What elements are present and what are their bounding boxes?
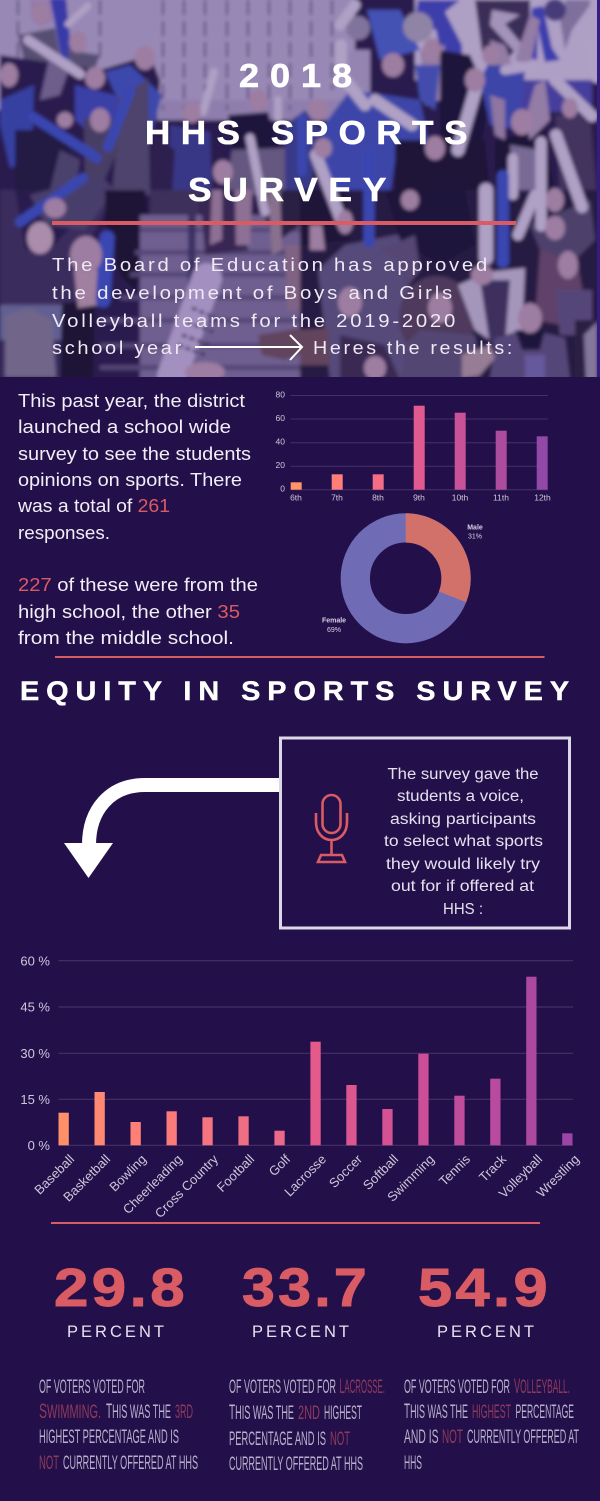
callout box	[280, 738, 570, 928]
bar chart: responses by grade: 11th	[493, 493, 509, 503]
icon: microphone	[316, 795, 347, 862]
infographic page: CURRENTLY OFFERED AT HHS	[63, 1453, 198, 1474]
stat: volleyball: NOT	[442, 1427, 463, 1448]
bar chart: responses by grade: 6th	[290, 493, 302, 503]
bar chart: sports interest: Track	[476, 1151, 509, 1185]
stat: lacrosse: 2ND	[298, 1403, 320, 1424]
top middle crowd	[168, 125, 212, 195]
heading: equity in sports survey: EQUITY IN SPORTS SURVEY	[20, 676, 576, 706]
bar chart: responses by grade	[276, 390, 551, 503]
blue tubes	[20, 92, 503, 300]
survey summary text: high school, the other 35	[18, 602, 240, 622]
bar chart: sports interest: Football	[214, 1151, 257, 1195]
stat: lacrosse: PERCENT	[252, 1323, 352, 1341]
bar chart: sports interest: Baseball	[31, 1151, 77, 1197]
stat: swimming: SWIMMING.	[39, 1400, 101, 1423]
bar chart: sports interest: 45 %	[20, 1000, 50, 1014]
lower right	[300, 190, 600, 380]
purple tint over photo	[0, 0, 597, 377]
infographic page: LACROSSE.	[340, 1375, 385, 1398]
survey summary text: This past year, the district	[18, 391, 245, 411]
intro text: school year	[52, 337, 184, 358]
top left crowd	[18, 28, 62, 65]
top right crowd	[367, 10, 420, 60]
bar chart: responses by grade: 80	[276, 390, 285, 400]
wall	[0, 0, 355, 110]
white tubes	[28, 5, 596, 376]
stat: swimming: NOT	[39, 1453, 59, 1474]
donut chart: gender split: 69%	[327, 627, 341, 634]
bar chart: responses by grade: 9th	[413, 493, 425, 503]
survey summary text: 227 of these were from the	[18, 575, 258, 595]
fists and faces	[0, 3, 578, 382]
intro text: Heres the results:	[313, 337, 515, 358]
title: HHS SPORTS	[145, 114, 478, 151]
survey summary text	[17, 391, 258, 648]
bar chart: sports interest	[20, 954, 582, 1221]
bar chart: sports interest: Basketball	[60, 1151, 113, 1205]
lower left	[0, 190, 108, 305]
callout text: HHS :	[443, 901, 483, 918]
stat: swimming: OF VOTERS VOTED FOR	[39, 1377, 145, 1398]
stat: swimming: THIS WAS THE	[106, 1400, 171, 1423]
bar chart: sports interest: Lacrosse	[281, 1152, 329, 1199]
survey summary text: opinions on sports. There	[18, 470, 242, 490]
callout text: to select what sports	[384, 833, 543, 850]
stat: volleyball: HHS	[404, 1453, 422, 1474]
stat: swimming: HIGHEST PERCENTAGE AND IS	[39, 1427, 179, 1448]
survey summary text: was a total of 261	[17, 496, 170, 516]
callout text: they would likely try	[386, 856, 540, 873]
bar chart: sports interest: 30 %	[20, 1046, 50, 1061]
stat: volleyball: 54.9	[418, 1258, 551, 1318]
section divider	[55, 656, 544, 658]
callout text: out for if offered at	[391, 878, 535, 895]
survey summary text: launched a school wide	[18, 417, 231, 437]
stat: lacrosse: CURRENTLY OFFERED AT HHS	[229, 1454, 363, 1475]
survey summary text: survey to see the students	[18, 444, 251, 464]
bar chart: responses by grade: 20	[276, 460, 285, 470]
survey summary text: responses.	[18, 523, 110, 543]
donut chart: gender split: 31%	[468, 534, 482, 540]
callout text: asking participants	[390, 811, 536, 828]
bar chart: sports interest: 15 %	[20, 1092, 50, 1107]
stat: lacrosse: NOT	[330, 1429, 350, 1450]
bar chart: sports interest: Volleyball	[496, 1151, 545, 1201]
bar chart: sports interest: Cheerleading	[120, 1152, 185, 1217]
stat: lacrosse: PERCENTAGE AND IS	[229, 1429, 326, 1450]
bar chart: sports interest: Soccer	[326, 1151, 366, 1191]
callout text	[384, 766, 543, 918]
pompoms	[346, 16, 370, 40]
stat: lacrosse: 33.7	[242, 1258, 370, 1318]
bar chart: sports interest: 60 %	[20, 954, 50, 968]
bar chart: sports interest: Golf	[266, 1151, 293, 1179]
donut chart: gender split: Female	[322, 618, 346, 624]
intro text: Volleyball teams for the 2019-2020	[52, 310, 458, 331]
bar chart: responses by grade: 12th	[534, 493, 551, 503]
bar chart: sports interest: 0 %	[28, 1138, 50, 1153]
stat: swimming: 3RD	[175, 1402, 193, 1423]
stat: swimming	[39, 1258, 198, 1474]
hero photo: cheering student crowd with purple tint	[0, 0, 600, 385]
stat: swimming: 29.8	[54, 1258, 188, 1318]
stat: lacrosse: OF VOTERS VOTED FOR	[229, 1377, 336, 1398]
stat: volleyball: HIGHEST	[472, 1402, 511, 1423]
bar chart: responses by grade: 0	[280, 484, 285, 494]
title: 2018	[239, 57, 363, 94]
donut chart: gender split	[322, 513, 483, 634]
intro text: the development of Boys and Girls	[52, 282, 455, 303]
banner	[415, 0, 600, 80]
bar chart: responses by grade: 8th	[372, 493, 384, 503]
bar chart: sports interest: Bowling	[106, 1152, 149, 1194]
stat: swimming: PERCENT	[67, 1323, 167, 1341]
bar chart: responses by grade: 60	[276, 413, 285, 423]
arrow: curved pointer to chart	[64, 785, 281, 878]
title divider	[52, 221, 516, 225]
stat: volleyball: AND IS	[404, 1427, 438, 1448]
callout text: The survey gave the	[388, 766, 538, 783]
arrow: to results	[195, 335, 302, 360]
bar chart: sports interest: Swimming	[384, 1152, 437, 1205]
bar chart: responses by grade: 10th	[452, 493, 469, 503]
survey summary text: from the middle school.	[18, 628, 234, 648]
donut chart: gender split: Male	[467, 524, 483, 532]
callout text: students a voice,	[397, 788, 524, 805]
stat: lacrosse: HIGHEST	[324, 1403, 362, 1424]
bar chart: sports interest: Softball	[360, 1151, 401, 1193]
bar chart: sports interest: Cross Country	[152, 1151, 221, 1221]
bar chart: sports interest: Wrestling	[533, 1152, 582, 1200]
intro text	[52, 254, 515, 358]
bar chart: responses by grade: 40	[276, 436, 285, 446]
stat: lacrosse: THIS WAS THE	[229, 1401, 294, 1424]
stat: volleyball: THIS WAS THE	[404, 1400, 468, 1423]
stat: lacrosse	[229, 1258, 385, 1475]
stat: volleyball: PERCENT	[437, 1323, 537, 1341]
stair people	[200, 190, 248, 255]
stat: volleyball	[404, 1258, 579, 1474]
title	[145, 57, 478, 208]
stats divider	[51, 1222, 540, 1224]
title: SURVEY	[188, 171, 397, 208]
bar chart: sports interest: Tennis	[436, 1151, 473, 1189]
bar chart: responses by grade: 7th	[331, 493, 343, 503]
intro text: The Board of Education has approved	[52, 254, 490, 275]
